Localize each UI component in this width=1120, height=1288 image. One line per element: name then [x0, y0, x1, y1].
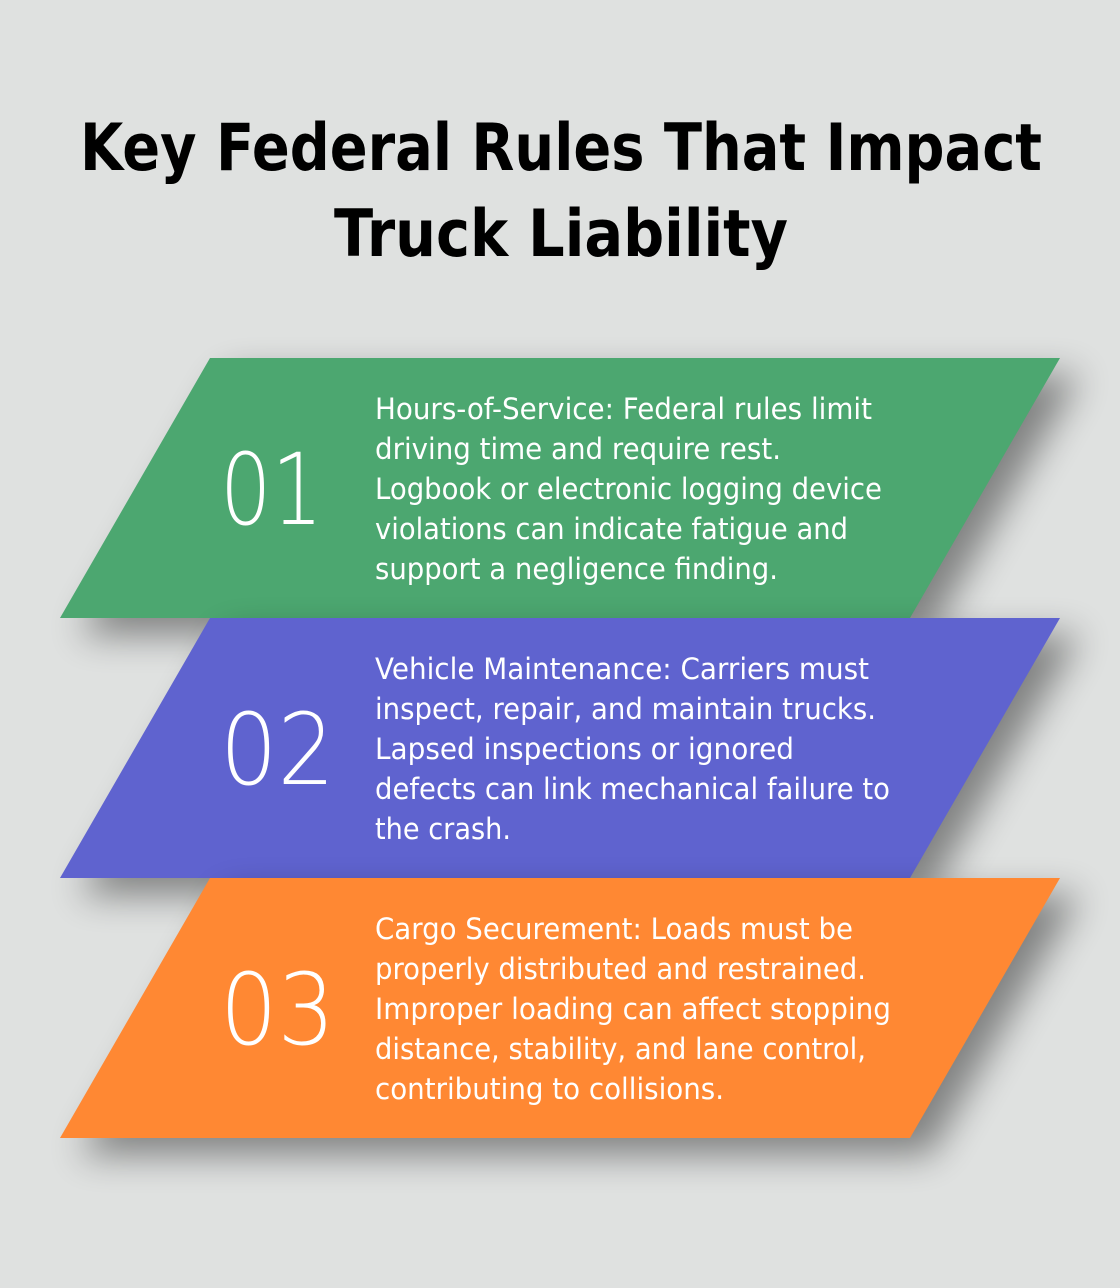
panel: vehicle maintenance: 02 — [220, 693, 335, 808]
panel: cargo securement: distance, stability, and lane control, — [375, 1032, 866, 1066]
panel: cargo securement — [60, 878, 1080, 1155]
title: Truck Liability — [334, 197, 788, 272]
panel: cargo securement: 03 — [220, 953, 335, 1068]
panel: vehicle maintenance: Vehicle Maintenance: Carriers must — [375, 652, 869, 686]
panel: hours of service: Hours-of-Service: Federal rules limit — [375, 392, 872, 426]
panel: cargo securement: Cargo Securement: Loads must be — [375, 912, 853, 946]
panel: vehicle maintenance: the crash. — [375, 812, 511, 846]
panel: hours of service: 01 — [220, 433, 323, 548]
panel: hours of service: Logbook or electronic logging device — [375, 472, 882, 506]
panel: hours of service: support a negligence finding. — [375, 552, 778, 586]
title — [80, 111, 1042, 272]
panel: vehicle maintenance: Lapsed inspections or ignored — [375, 732, 794, 766]
panel: hours of service: driving time and require rest. — [375, 432, 781, 466]
panel: vehicle maintenance: defects can link mechanical failure to — [375, 772, 890, 806]
panel: cargo securement: properly distributed and restrained. — [375, 952, 866, 986]
panel: cargo securement: contributing to collisions. — [375, 1072, 724, 1106]
panel: cargo securement: Improper loading can affect stopping — [375, 992, 891, 1026]
panel: vehicle maintenance — [60, 618, 1080, 895]
panel: hours of service — [60, 358, 1080, 635]
panel: vehicle maintenance: inspect, repair, and maintain trucks. — [375, 692, 876, 726]
panel: hours of service: violations can indicate fatigue and — [375, 512, 848, 546]
